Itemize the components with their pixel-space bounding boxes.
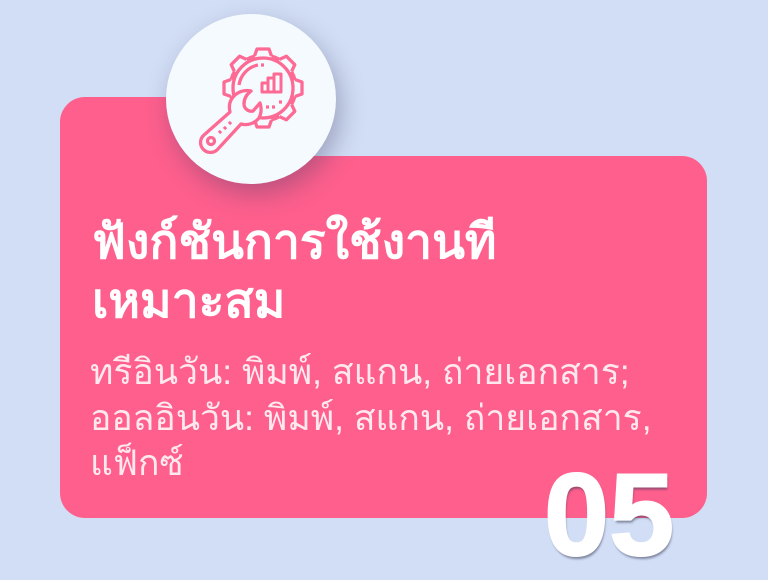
body text: ออลอินวัน: พิมพ์, สแกน, ถ่ายเอกสาร, xyxy=(90,398,652,438)
heading xyxy=(92,214,497,328)
number 05: 05 xyxy=(544,449,674,580)
heading: ฟังก์ชันการใช้งานที xyxy=(92,216,497,269)
body text: ทรีอินวัน: พิมพ์, สแกน, ถ่ายเอกสาร; xyxy=(90,352,630,392)
icon: wrench and gear xyxy=(198,47,304,154)
badge circle xyxy=(166,14,336,184)
body text xyxy=(90,352,652,483)
body text: แฟ็กซ์ xyxy=(90,443,184,483)
heading: เหมาะสม xyxy=(92,275,285,328)
